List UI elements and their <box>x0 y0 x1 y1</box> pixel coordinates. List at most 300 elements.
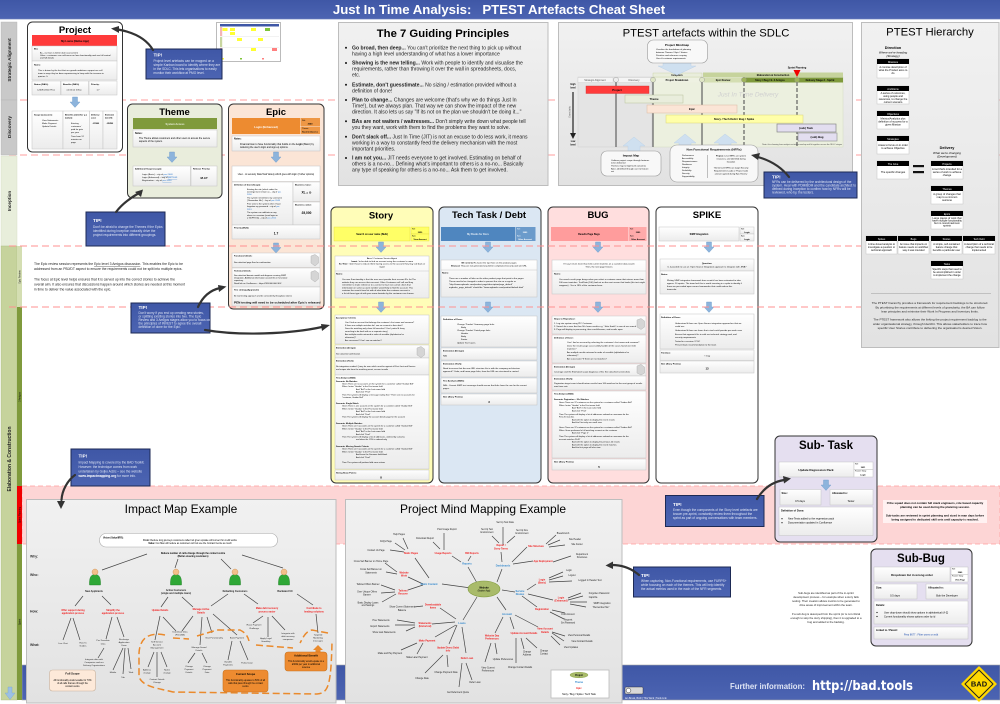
story points: Size (Story Points): <box>443 396 463 398</box>
tip: impact mapping <box>71 449 150 486</box>
status, benefits and priority boxes <box>32 81 117 95</box>
estimation: See attached confirmation <box>336 352 361 356</box>
epic labels: Update Direct Debit <box>437 646 459 650</box>
theme labels: Loans <box>458 622 466 625</box>
card: bugs: Bugs <box>911 238 917 241</box>
sub-bug explanation text: testing. Their creation allows metrics to be generated to <box>792 599 860 603</box>
story labels: Change Contact Details <box>508 666 533 669</box>
timebox: ½ Day <box>704 354 711 358</box>
estimation: Coverage and the Estimated scope diagnosis of 30, See attached screenshots <box>554 370 631 374</box>
size and value boxes: £9,000 <box>302 211 312 215</box>
principles list: Go broad, then deep... You can't prioritize the next thing to pick up without <box>352 45 522 51</box>
phase headers: Inception <box>671 74 683 77</box>
estimation tech: Estimation (Tech): <box>443 362 462 366</box>
title: Just In Time Analysis: PTEST Artefacts Cheat Sheet <box>333 2 666 17</box>
hierarchy explanation: wider organisational strategy, through IdentKit. This allows stakeholders to trace how <box>873 322 988 326</box>
story points <box>552 459 646 470</box>
bug description: 100 exact matches. Test/Data (100) had set on the next screen that loads (this test might <box>559 281 645 284</box>
artefact bars <box>586 86 837 141</box>
principles list: working in a way to constantly feed the delivery mechanism with the most <box>352 140 518 146</box>
non functional requirements box <box>670 145 758 182</box>
test scenarios: And "Bell" in the Last name field <box>356 388 385 391</box>
scope and benefits boxes: page <box>71 142 77 144</box>
deliverable labels: Tab <box>121 677 126 679</box>
epics and priority boxes: Login (Basic) – city of poc.2048 <box>142 173 173 176</box>
definition of done: 2050 <box>247 194 252 196</box>
deliverable labels: Details <box>186 671 193 674</box>
tip: sub-task: known pre-sprint, constantly review them throughout the <box>673 512 752 516</box>
estimation <box>335 345 429 358</box>
definition of done: Definition of Done: <box>554 336 574 340</box>
actor labels: Defaulting Customers <box>223 590 248 593</box>
card: projects: change <box>943 173 952 177</box>
story labels: Forgotten Password <box>589 592 610 595</box>
non functional requirements box: Supportability <box>682 175 696 178</box>
tech name bar: Other Account <box>518 238 532 241</box>
arrow: tip to sub-task <box>757 476 791 499</box>
card: projects: Projects <box>942 162 952 166</box>
creative commons badge <box>625 687 667 700</box>
scope and benefits boxes: £150K <box>93 123 100 125</box>
row labels <box>30 554 39 647</box>
tip: mind mapping: while focusing on each of the themes. This will help identify <box>641 583 725 587</box>
artefact bars: Story / Tech Debt / Bug / Spike <box>714 117 755 121</box>
test strategy <box>232 287 321 306</box>
definition of done: otherwise)? <box>567 354 579 357</box>
direction label <box>879 46 907 58</box>
artefact bars: (sub) Task <box>799 126 813 130</box>
heading: sub-task: Sub- Task <box>799 440 854 452</box>
epic name bar: Theme: <box>302 128 309 130</box>
theme labels: Static Content <box>421 583 438 586</box>
deliverable labels: Payment <box>203 668 212 671</box>
test scenarios: When I enter "Guidan" in the First name field <box>342 407 382 410</box>
impact labels: application process <box>102 612 125 615</box>
panel: ptest artefacts within the sdlc <box>558 22 852 186</box>
deliverable labels: Raise Payment <box>247 624 262 626</box>
project mindmap box: User & customer requirements <box>656 57 687 60</box>
deliverable labels: Integrate with <box>281 632 295 635</box>
spike name bar: Epic: <box>741 236 746 238</box>
estimation tests: No integration needed. Query for user which must be against all First Last and Service <box>336 365 416 368</box>
definition of done: where in a session (must login on <box>247 214 279 217</box>
deliverable labels: Integrate data with <box>85 658 104 661</box>
test scenarios: And click "Find" <box>356 413 370 416</box>
size box: Size: <box>782 491 788 495</box>
definition of done: Understand if there are hours that a tool could provide per week save <box>675 329 743 332</box>
story labels: Change Payment Date <box>434 671 458 674</box>
project mindmap box: Project Mindmap <box>665 43 689 47</box>
tip: sdlc nfrs: reviewed, who by, the testers. <box>772 190 814 194</box>
deliverable labels: Application <box>119 641 130 644</box>
goal and notes: We need to Re-factor the top three on the product pages <box>461 262 518 264</box>
stage: epic review: Epic Review <box>18 270 21 284</box>
down arrow <box>376 302 386 312</box>
tip: sub-task: Even though the components of the Story level artefacts are <box>673 508 758 512</box>
sub-task name bar: 3631 <box>861 467 866 469</box>
steps to reproduce <box>552 316 646 334</box>
principles list: Time!), but we always plan. That way we can show the impact of the new <box>352 104 517 110</box>
heading: spike: SPIKE <box>693 210 721 221</box>
definition of done: Body <box>461 336 467 338</box>
epic notes: widening the user's login and sign-up options. <box>240 146 289 149</box>
steps to reproduce: Steps to Reproduce: <box>554 318 576 320</box>
arrow: tip to project <box>111 26 153 50</box>
notes box: Notes: <box>34 64 41 66</box>
scope and benefits boxes: Benefits (whether p.) <box>65 114 87 116</box>
impact map box: set <box>611 170 614 173</box>
milestone lines <box>616 82 797 147</box>
notes box <box>32 61 117 80</box>
test scenarios: Then The system will display a message stating that: "There are no accounts for <box>342 393 415 396</box>
theme labels: Service <box>516 590 525 593</box>
vision box: Value: Iron Man will reduce as customers will not use the Contact Centre as much <box>148 542 232 545</box>
definition of done: Are multiple results returned in order of sensible (alphabetical or <box>567 351 629 354</box>
card: objectives: given Mission <box>885 122 901 126</box>
estimation tech: approach? Code, and home page links, from the URL are structured in control. <box>443 370 519 373</box>
card: bugs: An issue that impacts on <box>900 243 928 246</box>
phase: discovery: Discovery <box>7 116 12 138</box>
card: epics: have multiple functionality <box>932 218 963 222</box>
test scenarios: When I enter "Guidan" in the First name field <box>559 404 599 407</box>
deliverable labels: change <box>163 672 171 674</box>
test strategy: PEN testing will need to be scheduled after Epic's released <box>234 300 321 304</box>
heading: tech task / debt: Tech Task / Debt <box>452 210 527 221</box>
test scenarios: Test Analysis (BDD): <box>336 376 356 380</box>
down arrow <box>483 242 493 252</box>
scope and benefits boxes: Scope (outcome): <box>34 114 53 116</box>
story labels: Post Usage Report <box>437 528 457 531</box>
story labels: Set Up Test Data <box>496 521 514 524</box>
tip: sdlc nfrs: system. Hear with PDM/BDM and the candidate architect to <box>772 184 856 188</box>
estimation: Estimation (design): <box>336 346 356 350</box>
phase: strategic alignment: Strategic Alignment <box>7 38 12 82</box>
tip: mind mapping <box>634 567 730 597</box>
sub-task name bar: Parent: Story: <box>855 470 867 472</box>
epic notes: Financial loan to have functionality that builds on the Login (Basic) by <box>240 143 315 146</box>
goal and notes: These need to be changed in order to prevent the site on a regular or <box>449 280 516 283</box>
additional benefit box: £300k per year in additional <box>292 663 321 666</box>
epic labels: Defer Loan <box>461 657 474 660</box>
tip: sdlc nfrs <box>764 172 857 198</box>
definition of done: Definition of Done: <box>781 508 804 512</box>
definition of done: Are successes? If there are no matches? <box>567 358 608 360</box>
test scenarios: Then The system will display a list of addresses ordered on username for the <box>559 435 630 438</box>
card: mission: do <box>892 71 895 75</box>
story labels: Show Current Statement <box>389 606 415 608</box>
theme notes <box>133 130 217 147</box>
epic labels: Login <box>558 596 565 600</box>
deliverable labels: Partial Loan <box>241 662 254 664</box>
story points <box>335 470 429 480</box>
panel: project mind mapping example <box>346 500 622 703</box>
epic labels: Downloadable <box>425 604 442 606</box>
card: projects <box>931 161 963 179</box>
test scenarios: Given There is one account on the system for a customer called "Guidan Bell" <box>342 405 413 408</box>
epic labels: Tailored <box>398 590 408 592</box>
definition of done: Change 'Product' Detail page links <box>457 329 491 332</box>
heading: project: Project <box>59 25 92 36</box>
spike name bar: Ref: <box>741 228 745 230</box>
story points: Size (Story Points): <box>661 362 681 366</box>
card: epics <box>931 211 963 229</box>
epic labels: Work <box>401 574 408 578</box>
phase: inception <box>1 156 17 246</box>
epic labels: Info <box>446 650 451 652</box>
test scenarios: And click "Find" <box>572 409 586 412</box>
impact labels: Details <box>197 612 206 614</box>
down arrow <box>483 302 493 312</box>
user story and notes: I want / to be able to find an account using the customer's name <box>351 260 414 263</box>
goal: (Better ensuring customers) <box>178 555 209 558</box>
panel: sub-bug <box>871 549 972 646</box>
non functional details <box>232 268 320 287</box>
theme labels: Dashboards <box>496 564 511 568</box>
story labels <box>354 521 611 694</box>
epic labels: View Account <box>537 628 553 630</box>
story labels: Get Deferment Quote <box>447 691 470 694</box>
test scenarios: Then The system will perform field error actions <box>342 461 385 464</box>
full scope box <box>50 670 96 691</box>
story labels: FAQs Page <box>380 540 393 543</box>
test scenarios: Scenario: Single Match <box>336 402 359 405</box>
vision box <box>100 534 278 547</box>
tip: sub-task: TIP! <box>673 502 682 507</box>
deliverable labels: change <box>143 672 151 674</box>
current scope box: centre <box>242 685 249 688</box>
sprint planning marker: Sprint Planning <box>788 66 807 70</box>
tip: impact mapping: However: the technique comes from work <box>78 465 138 469</box>
acceptance criteria: searching to be dealt with as a separate story) <box>345 330 388 333</box>
definition of done: existing) must remain as – city of poc <box>247 191 281 194</box>
bug description: Then, the next page freezes <box>585 266 614 268</box>
test analysis <box>441 378 537 393</box>
test strategy: Test strategy (Approach): <box>234 288 259 292</box>
bio box: Bio: <box>34 48 39 50</box>
definition of done <box>660 314 754 349</box>
status, benefits and priority boxes: Priority: <box>91 83 100 86</box>
tip: epic review: definition of done for the Epic. <box>138 325 181 329</box>
allocated to box <box>830 490 873 505</box>
goal and notes: Notes: <box>442 272 449 274</box>
bug name bar <box>551 227 646 241</box>
size box: Size: <box>876 586 882 590</box>
card: epics: sprints <box>943 224 952 228</box>
non functional requirements box: Security <box>682 172 690 175</box>
spike name bar: Login <box>744 239 750 241</box>
current scope box <box>223 670 268 692</box>
details box: Current functionality shows options order by id <box>884 616 936 618</box>
impact map box: Epics identified through user to feature <box>611 167 649 170</box>
bug name bar: Ref: <box>630 228 634 230</box>
map legend <box>551 670 609 698</box>
scope and benefits boxes: Time from 12 <box>71 135 85 138</box>
deliverable labels: Change <box>153 682 162 684</box>
definition of done: Present back recommendation to the team <box>675 344 716 346</box>
test scenarios: And leave the Surname field blank <box>356 453 388 456</box>
pale arrows into timeline <box>623 63 737 152</box>
phase: strategic alignment <box>1 22 17 100</box>
card: themes: outcome <box>942 198 953 202</box>
card: strategies: to achieve Objective <box>881 146 905 150</box>
non functional details: Technical details: <box>234 270 252 272</box>
acceptance criteria: otherwise)? <box>345 336 357 339</box>
sub-bug name bar: 2040 <box>958 571 963 574</box>
principles list: any type of speaking for others is a no-no... Ask them to get involved. <box>352 168 508 174</box>
acceptance criteria <box>335 315 429 344</box>
principles list: having a high level understanding of what has a lower importance <box>352 51 500 57</box>
spike question and notes: Writing SIMP integration framework from scratch has been estimated to take <box>667 279 742 282</box>
heading: Project Mind Mapping Example <box>400 502 566 516</box>
card: mission: Missions <box>888 60 899 64</box>
spike name bar: SIMP Integration <box>690 233 709 236</box>
connecting lines <box>63 554 318 677</box>
scope and benefits boxes <box>32 111 117 149</box>
principles list: requirements, rather than throwing it over the wall in spreadsheets, docs, <box>352 67 516 73</box>
dashed guide lines in front of panels <box>9 246 861 307</box>
epic review explanation text: The Epic review session represents the Epic level 3 Amigos discussion. This enables the Epic to be <box>34 262 183 266</box>
tip: epic review: TIP! <box>138 305 148 310</box>
phase headers: Discovery <box>629 79 640 82</box>
story labels: Request <box>564 618 573 622</box>
card: spikes: feature change that <box>936 246 958 249</box>
goal and notes: "http://www.mybooks.com/product-page/description/page_default" <box>449 283 513 286</box>
goal and notes: There are a number of links on the other product page that point to the pages <box>449 277 525 280</box>
definition of done: Can I find an account by selecting the customer's first name and surname? <box>567 341 640 344</box>
strategic and discovery background <box>578 77 652 147</box>
story labels: View Current <box>481 666 495 670</box>
down arrow <box>704 242 714 252</box>
story points: 5 <box>598 465 600 469</box>
spike question and notes: approx. 10 sprints. The team feel this is worth investing in a spike to identify if <box>667 282 742 285</box>
heading: bug: BUG <box>587 210 609 221</box>
stage: sprint: Sprint <box>18 619 21 625</box>
definition of done: a GDPR link) – city of poc.2052 <box>247 216 277 219</box>
story name bar: View Account <box>413 238 427 241</box>
size box <box>780 490 821 505</box>
test scenarios: When I enter "Guidan" in the First name field <box>342 385 382 388</box>
milestone circles <box>614 77 800 82</box>
tip: mind mapping: TIP! <box>641 573 650 578</box>
epic review explanation text: The focus at Epic level helps ensures that it is carved up into the correct stories to achieve the <box>34 278 175 282</box>
card: themes: A group of changes that <box>933 192 961 196</box>
tip: project kanban: in the SDLC. This lets organisations to easily <box>154 67 217 71</box>
scope and benefits boxes: minutes on <box>71 138 82 141</box>
estimation tests <box>335 358 429 375</box>
deliverable labels: Change <box>185 666 194 668</box>
impact labels: Update Details <box>152 609 169 612</box>
footer banner <box>22 665 1000 701</box>
BAD logo sign: BAD <box>971 680 988 688</box>
test scenarios: Test Analysis (BDD): <box>554 392 574 396</box>
epic labels: Website <box>399 572 409 574</box>
tip: project kanban: TIP! <box>154 52 163 58</box>
sub-bug explanation text: development process – for example when a story fails <box>793 595 859 599</box>
epic labels: Make Payment <box>419 640 436 642</box>
theme notes: Notes: <box>135 132 143 135</box>
user story and notes: a list of these type of with your name besides by the customer can choose. <box>342 292 415 295</box>
tip: impact mapping: Impact Mapping is covered by the BAD Toolkit. <box>78 460 144 464</box>
down arrow <box>821 480 831 490</box>
deliverable labels: Hardship <box>262 640 271 643</box>
epics and priority boxes: Additional Scope (scope): <box>135 168 162 170</box>
deliverable labels: Live Chat <box>58 642 68 645</box>
card: epics: but no more/maximum <box>934 221 960 225</box>
goal and notes: mybooks_page_default" should be "/www.mybooks.com/product/default.html" <box>449 286 524 289</box>
card: bugs: way it was intended <box>903 249 925 252</box>
card: ambitions: using people and <box>883 94 903 98</box>
impact labels: lending solutions <box>304 610 325 614</box>
card: the ask: The Give <box>888 162 899 166</box>
epic labels: (Historical) <box>419 625 431 628</box>
epic labels: App Deployment <box>534 560 553 563</box>
tip: project kanban: monitor their workflow at PMO level. <box>154 71 205 75</box>
size and value boxes: Business value: <box>295 204 312 206</box>
central node <box>468 581 500 597</box>
story labels: Site Footer <box>571 543 583 546</box>
arrow: tip to nfrs <box>751 153 789 177</box>
allocated to box: Allocated to: <box>832 491 848 495</box>
card: tasks: be accomplished in order <box>933 271 961 274</box>
test scenarios: Scenario: Pagination – 20+ Matches <box>554 398 590 401</box>
hierarchy explanation: specific User Stories contribute to delivering the organisation's desired Vision. <box>878 326 982 330</box>
definition of done: could use <box>675 326 685 328</box>
principles list: important priorities. <box>352 146 395 152</box>
non functional details: Read link on Confluence – https://303.000.000.301/ <box>234 282 282 285</box>
story labels: Cross Sell Banner on Home Page <box>354 560 389 563</box>
delivery label <box>933 146 961 158</box>
dashed guide lines behind panels <box>9 100 1000 155</box>
test scenarios: "customer, Guidan Bell" <box>342 396 364 399</box>
details box <box>874 601 968 624</box>
story name bar: Epic: <box>412 236 417 238</box>
theme name bar: System Access <box>166 122 185 126</box>
deliverable labels: Variable <box>224 660 233 664</box>
card: spikes: benefits a particular user <box>933 249 960 252</box>
epics and priority boxes: Registration – city of poc.2050 <box>142 179 172 182</box>
story labels: Login <box>566 570 573 572</box>
panel: bug <box>548 207 649 483</box>
card: themes <box>931 186 963 204</box>
additional benefit box: revenue <box>302 666 311 669</box>
sub-task name bar: Ref: <box>855 464 859 466</box>
non functional requirements box: and are agreed during Epic Review <box>715 172 748 176</box>
phase headers: Project Breakdown <box>666 79 689 82</box>
project mindmap box <box>648 40 708 63</box>
deliverable labels: Address <box>143 668 152 672</box>
red name bar: My Loans (Native App) <box>61 39 89 43</box>
test scenarios: And "Bell" in the Last name field <box>572 407 601 410</box>
estimation tech <box>552 376 646 390</box>
central node: (Native App) <box>478 590 491 592</box>
acceptance criteria: Can I find an account that belongs the customer's first name and surname? <box>345 321 415 324</box>
sdlc timeline chart <box>568 66 843 147</box>
phase headers: Story / Bug / E. 3 Amigos <box>755 79 785 82</box>
tip: sdlc nfrs: NFRs can be delivered by the architectural design of the <box>772 180 852 184</box>
card: objectives: Objectives <box>887 112 900 116</box>
deliverable labels: Payments <box>223 664 234 666</box>
epic labels: (Enhanced) <box>554 600 568 602</box>
row labels: What: <box>30 643 39 647</box>
pink sprint planning band <box>22 486 1000 544</box>
panel: 7 guiding principles <box>338 22 548 186</box>
epic name bar: Ref: <box>302 120 306 122</box>
tip: themes: project requirements into different groupings. <box>93 233 156 237</box>
epic labels: Update Account Details <box>511 632 538 635</box>
story labels: Captcha <box>589 596 598 599</box>
card: the ask <box>877 161 909 179</box>
phase headers <box>578 72 843 82</box>
